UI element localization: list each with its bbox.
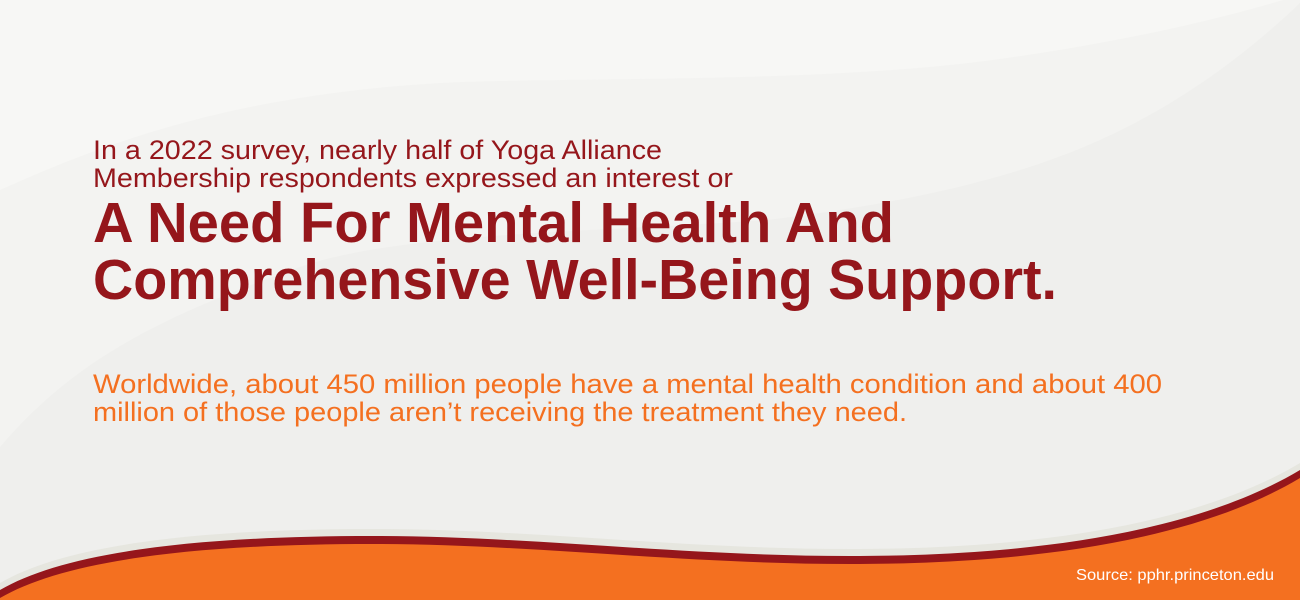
orange statistic text: Worldwide, about 450 million people have a mental health condition and about 400 bbox=[93, 369, 1162, 399]
intro text: In a 2022 survey, nearly half of Yoga Alliance bbox=[93, 135, 662, 165]
main heading: Comprehensive Well-Being Support. bbox=[93, 248, 1057, 312]
bottom wave: red band bbox=[0, 470, 1300, 600]
source note: Source: pphr.princeton.edu bbox=[1076, 567, 1274, 584]
main heading bbox=[93, 191, 1057, 312]
intro text: Membership respondents expressed an interest or bbox=[93, 163, 733, 193]
bottom wave: orange band bbox=[0, 478, 1300, 600]
intro text bbox=[93, 135, 733, 193]
orange statistic text bbox=[93, 369, 1162, 427]
orange statistic text: million of those people aren’t receiving the treatment they need. bbox=[93, 397, 907, 427]
main heading: A Need For Mental Health And bbox=[93, 191, 894, 255]
bottom wave: beige edge bbox=[0, 463, 1300, 600]
